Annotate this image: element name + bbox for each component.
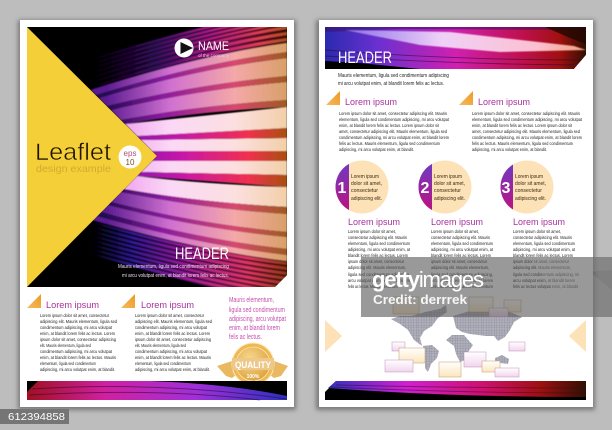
left column 2: enim, at blandit lorem felis ac lectus. Lorem (135, 331, 210, 336)
lower column 1: Lorem ipsum (348, 217, 400, 228)
numbered circle 3: 3 (502, 180, 511, 197)
lower column 2: consectetur adipiscing elit. Mauris (431, 235, 491, 240)
left column 2 (121, 294, 212, 372)
header intro text: Mauris elementum, ligula sed condimentum adipiscing (338, 73, 449, 79)
lower column 1: adipiscing elit. Mauris elementum, (348, 265, 406, 270)
lower column 2: arcu volutpat enim, at blandit lorem (431, 278, 493, 283)
image id label (0, 409, 69, 424)
left column 1: enim, at blandit lorem felis ac lectus. Lorem (40, 331, 115, 336)
left column 1 (27, 294, 117, 372)
left page (18, 8, 296, 410)
pink text block: enim, at blandit lorem (229, 323, 280, 332)
logo: play icon and NAME (174, 38, 230, 58)
lower column 2: Lorem ipsum dolor sit amet, (431, 229, 479, 234)
cover header: Mauris elementum, ligula sed condimentum adipiscing (118, 264, 229, 270)
header band (325, 27, 586, 69)
top column 2: Lorem ipsum (478, 97, 530, 108)
left column 1: elit. Mauris elementum, ligula sed (40, 343, 91, 348)
logo: play icon and NAME: of the company (198, 53, 230, 58)
lower column 2: ligula sed condimentum adipiscing, (431, 272, 493, 277)
numbered circle 2: dolor sit amet, (434, 181, 465, 187)
numbered circle 3 (500, 160, 554, 214)
left column 2: elementum, ligula sed condimentum (135, 361, 191, 366)
numbered circle 2: adipiscing elit. (434, 196, 465, 202)
world map (385, 297, 525, 377)
lower column 2: adipiscing, mi arcu volutpat enim, at (431, 247, 494, 252)
pink text block: adipiscing, arcu volutpat (229, 314, 287, 323)
lower column 3: arcu volutpat enim, at blandit lorem (513, 278, 575, 283)
right page (316, 20, 595, 410)
lower column 3: blandit lorem felis ac lectus. Lorem (513, 253, 573, 258)
numbered circle 2: consectetur (434, 188, 461, 194)
lower column 3 (513, 217, 579, 289)
lower column 2: felis ac lectus. Mauris elementum (431, 284, 493, 289)
header intro text (338, 73, 449, 87)
top column 1: condimentum adipiscing, mi arcu volutpat enim, at blandit lorem (339, 135, 449, 140)
left column 2: enim, at blandit lorem felis ac lectus. Mauris (135, 355, 212, 360)
quality badge: 100% (247, 374, 260, 380)
left column 2: ipsum dolor sit amet, consectetur adipiscing (135, 337, 211, 342)
left footer band (27, 381, 287, 400)
badge: eps 10 (118, 146, 142, 168)
numbered circle 1: 1 (338, 180, 347, 197)
pink text block (229, 295, 287, 341)
right footer band (325, 381, 586, 400)
lower column 2 (431, 217, 494, 289)
lower column 1 (348, 217, 411, 289)
numbered circle 1: dolor sit amet, (351, 181, 382, 187)
lower column 3: adipiscing, mi arcu volutpat enim, at (513, 247, 576, 252)
left column 2: elit. Mauris elementum, ligula sed (135, 343, 186, 348)
top column 1: enim, at blandit lorem felis ac lectus. Lorem ipsum dolor sit (339, 123, 440, 128)
lower column 3: elementum, ligula sed condimentum (513, 241, 575, 246)
arrow: right peach triangle (569, 320, 586, 352)
subtitle: design example: design example (36, 163, 111, 175)
top column 1 (326, 91, 450, 152)
numbered circle 1: adipiscing elit. (351, 196, 382, 202)
top column 2: felis ac lectus. Mauris elementum, ligula sed condimentum (472, 141, 573, 146)
top column 1: amet, consectetur adipiscing elit. Mauris elementum, ligula sed (339, 129, 447, 134)
cover header: mi arcu volutpat enim, at blandit lorem felis ac lectus. (122, 273, 229, 279)
top column 2: elementum, ligula sed condimentum adipiscing, mi arcu volutpat (472, 117, 583, 122)
top column 2: Lorem ipsum dolor sit amet, consectetur adipiscing elit. Mauris (472, 111, 581, 116)
arrow: left peach triangle (325, 320, 342, 352)
top column 2: amet, consectetur adipiscing elit. Mauris elementum, ligula sed (472, 129, 580, 134)
numbered circle 3: adipiscing elit. (515, 196, 546, 202)
lower column 1: adipiscing, mi arcu volutpat enim, at (348, 247, 411, 252)
left column 1: Lorem ipsum dolor sit amet, consectetur (40, 313, 109, 318)
yellow triangle (27, 27, 157, 287)
quality badge: QUALITY (235, 360, 272, 371)
left column 1: condimentum adipiscing, mi arcu volutpat (40, 325, 113, 330)
cover artwork: ray fan (27, 27, 287, 287)
numbered circle 1: Lorem ipsum (351, 174, 379, 180)
top column 1: Lorem ipsum dolor sit amet, consectetur adipiscing elit. Mauris (339, 111, 448, 116)
left column 2: Lorem ipsum (141, 300, 194, 311)
lower column 1: ipsum dolor sit amet, consectetur (348, 259, 404, 264)
logo: play icon and NAME: NAME (198, 39, 229, 53)
header title: HEADER (338, 48, 392, 67)
lower column 3: adipiscing elit. Mauris elementum, (513, 265, 571, 270)
numbered circle 3: consectetur (515, 188, 542, 194)
lower column 1: ligula sed condimentum adipiscing, (348, 272, 410, 277)
lower column 2: elementum, ligula sed condimentum (431, 241, 493, 246)
watermark: getty images: gettyimages (372, 267, 484, 292)
top column 1: felis ac lectus. Mauris elementum, ligula sed condimentum (339, 141, 440, 146)
lower column 3: ipsum dolor sit amet, consectetur (513, 259, 569, 264)
left column 2: condimentum adipiscing, mi arcu volutpat (135, 325, 208, 330)
badge: eps 10: eps (124, 149, 136, 158)
left column 1: condimentum adipiscing, mi arcu volutpat (40, 349, 113, 354)
numbered circle 2 (418, 160, 472, 214)
cover header (118, 244, 229, 279)
top column 1: Lorem ipsum (345, 97, 397, 108)
lower column 3: Lorem ipsum (513, 217, 565, 228)
lower column 2: Lorem ipsum (431, 217, 483, 228)
left column 2: condimentum adipiscing, mi arcu volutpat (135, 349, 208, 354)
pink text block: felis ac lectus. (229, 332, 262, 341)
lower column 2: blandit lorem felis ac lectus. Lorem (431, 253, 491, 258)
numbered circle 3: dolor sit amet, (515, 181, 546, 187)
lower column 1: elementum, ligula sed condimentum (348, 241, 410, 246)
top column 2: condimentum adipiscing, mi arcu volutpat enim, at blandit lorem (472, 135, 582, 140)
left column 2: Lorem ipsum dolor sit amet, consectetur (135, 313, 204, 318)
header intro text: mi arcu volutpat enim, at blandit lorem felis ac lectus. (338, 81, 444, 87)
top column 2 (459, 91, 583, 152)
left column 1: Lorem ipsum (46, 300, 99, 311)
left column 1: enim, at blandit lorem felis ac lectus. Mauris (40, 355, 117, 360)
lower column 1: Lorem ipsum dolor sit amet, (348, 229, 396, 234)
cover header: HEADER (175, 244, 229, 263)
left column 1: elementum, ligula sed condimentum (40, 361, 96, 366)
numbered circle 1 (336, 160, 388, 214)
lower column 1: arcu volutpat enim, at blandit lorem (348, 278, 410, 283)
image id label: 612394858 (8, 411, 65, 423)
lower column 2: ipsum dolor sit amet, consectetur (431, 259, 487, 264)
left column 2: adipiscing, mi arcu volutpat enim, at blandit. (135, 367, 210, 372)
lower column 3: consectetur adipiscing elit. Mauris (513, 235, 573, 240)
numbered circle 1: consectetur (351, 188, 378, 194)
numbered circle 2: Lorem ipsum (434, 174, 462, 180)
lower column 1: consectetur adipiscing elit. Mauris (348, 235, 408, 240)
lower column 3: ligula sed condimentum adipiscing, mi (513, 272, 579, 277)
left column 1: adipiscing, mi arcu volutpat enim, at blandit. (40, 367, 115, 372)
badge: eps 10: 10 (126, 158, 135, 167)
watermark: getty images (361, 257, 612, 317)
top column 2: enim, at blandit lorem felis ac lectus. Lorem ipsum dolor sit (472, 123, 573, 128)
map callout boxes (385, 297, 525, 377)
top column 1: adipiscing, mi arcu volutpat enim, at blandit. (339, 147, 414, 152)
top column 2: adipiscing, mi arcu volutpat enim, at blandit. (472, 147, 547, 152)
numbered circle 3: Lorem ipsum (515, 174, 543, 180)
pink text block: ligula sed condimentum (229, 305, 285, 314)
numbered circle 2: 2 (421, 180, 430, 197)
lower column 3: Lorem ipsum dolor sit amet, (513, 229, 561, 234)
top column 1: elementum, ligula sed condimentum adipiscing, mi arcu volutpat (339, 117, 450, 122)
title: Leaflet: Leaflet (35, 139, 111, 166)
left column 2: adipiscing elit. Mauris elementum, ligula sed (135, 319, 212, 324)
lower column 3: felis ac lectus volutpat enim, at blandit (513, 284, 579, 289)
watermark: getty images: Credit: derrrek (373, 293, 467, 307)
quality badge (217, 343, 288, 385)
left column 1: adipiscing elit. Mauris elementum, ligula sed (40, 319, 117, 324)
lower column 1: blandit lorem felis ac lectus. Lorem (348, 253, 408, 258)
left column 1: ipsum dolor sit amet, consectetur adipiscing (40, 337, 116, 342)
pink text block: Mauris elementum, (229, 295, 274, 304)
lower column 2: adipiscing elit. Mauris elementum, (431, 265, 489, 270)
lower column 1: felis ac lectus. Mauris elementum (348, 284, 398, 289)
